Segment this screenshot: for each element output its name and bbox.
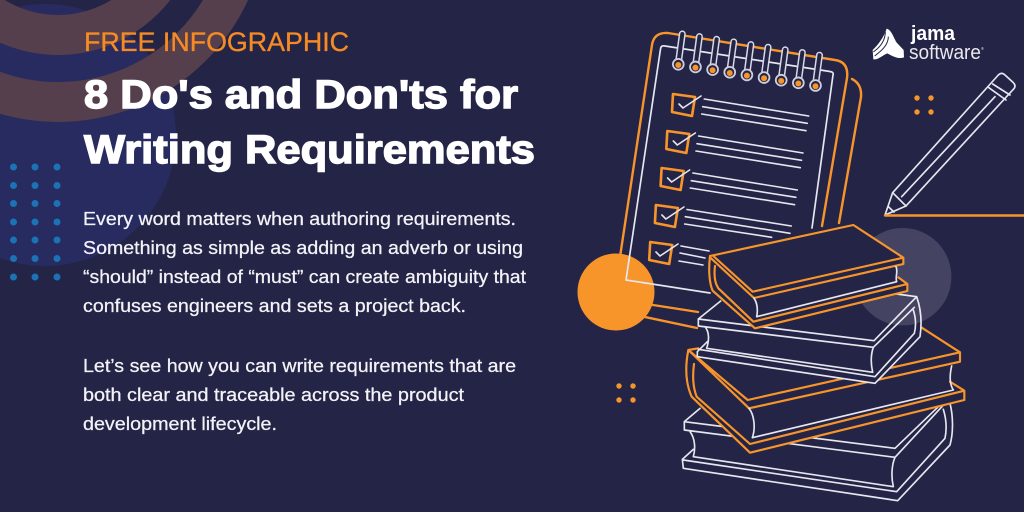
background decoration: blue circle and rings [0,0,247,266]
closing paragraph: development lifecycle. [83,413,277,434]
intro paragraph: Every word matters when authoring requirements. [83,208,516,229]
closing paragraph: both clear and traceable across the product [83,384,464,405]
bottom book [682,373,952,501]
orange dots upper [914,95,934,115]
jama software logo [873,23,984,64]
checklist rows [649,94,809,265]
intro paragraph: confuses engineers and sets a project back. [83,295,466,316]
jama software logo: software [909,42,981,64]
top orange book [709,225,907,328]
title: 8 Do's and Don'ts for [84,73,518,117]
pencil underline [885,214,1024,217]
stack of books [682,225,964,501]
intro paragraph [83,208,526,316]
blue dot grid [10,164,60,280]
pencil icon [885,73,1015,215]
closing paragraph: Let’s see how you can write requirements that are [83,355,516,376]
title: Writing Requirements [84,128,535,172]
orange dots lower [616,383,636,403]
intro paragraph: Something as simple as adding an adverb or using [83,237,523,258]
jama software logo: jama [910,23,956,45]
notebook illustration [578,33,861,331]
eyebrow: free infographic: FREE INFOGRAPHIC [84,27,349,57]
title [84,73,535,172]
jama software logo: ® [981,46,984,51]
second white book [697,294,921,383]
pale circle [854,228,951,325]
intro paragraph: “should” instead of “must” can create ambiguity that [83,266,526,287]
orange book [686,318,964,453]
spiral binding rings [673,34,821,91]
closing paragraph [83,355,516,434]
logo mark [873,29,904,59]
